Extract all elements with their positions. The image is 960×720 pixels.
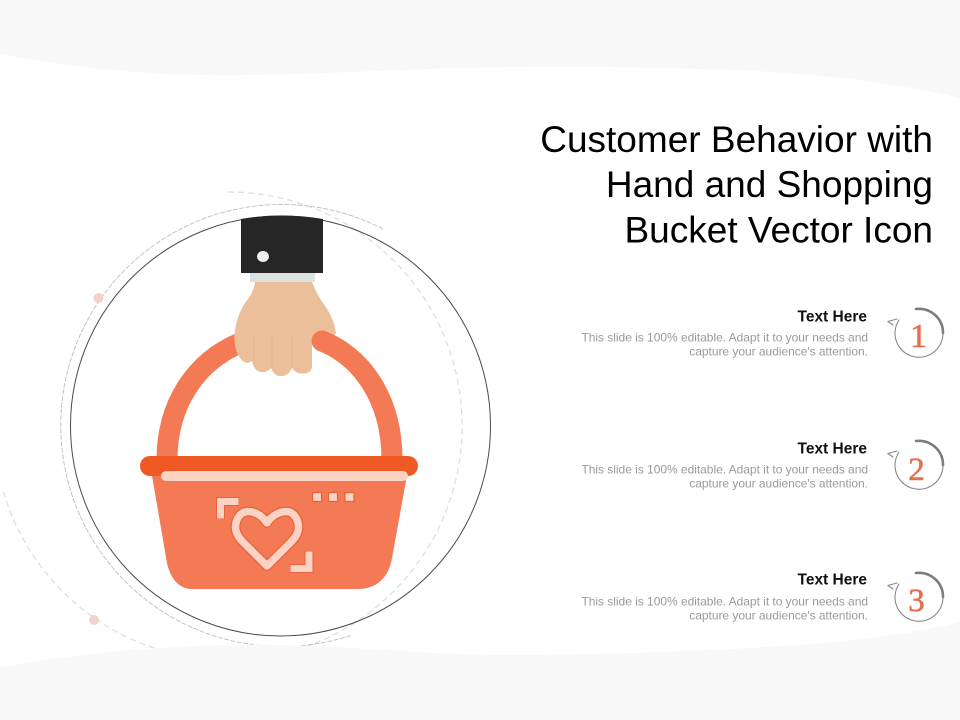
finger creases <box>254 335 292 368</box>
orbit dot lower <box>89 615 99 625</box>
heart icon <box>236 512 298 566</box>
item 3 <box>581 572 943 622</box>
jacket sleeve <box>241 216 323 273</box>
background top wave <box>0 0 960 98</box>
item 1 description: capture your audience's attention. <box>689 344 868 358</box>
item 2 description: capture your audience's attention. <box>689 476 868 490</box>
item 2 ring arrow <box>888 441 943 489</box>
focus bracket bottom-right <box>290 551 309 568</box>
dashed orbit: grey arc <box>61 204 383 646</box>
item 3 description: capture your audience's attention. <box>689 608 868 622</box>
rim highlight <box>161 471 408 481</box>
item 2 heading: Text Here <box>798 440 867 458</box>
item 3 number: 3 <box>908 583 925 619</box>
basket body <box>151 470 408 589</box>
shirt cuff <box>250 272 315 282</box>
basket rim <box>140 456 418 476</box>
dots on basket <box>312 492 354 502</box>
title: Bucket Vector Icon <box>624 210 933 250</box>
dashed orbit: light outer arc <box>3 192 462 660</box>
title: Hand and Shopping <box>606 164 933 205</box>
orbit dot upper <box>94 293 104 303</box>
sleeve button <box>257 251 269 262</box>
item 1 <box>581 308 943 358</box>
item 1 number: 1 <box>910 318 927 355</box>
item 3 heading: Text Here <box>798 572 867 588</box>
bottom wave <box>0 622 960 720</box>
solid circle <box>70 216 490 636</box>
item 3 description: This slide is 100% editable. Adapt it to your needs and <box>581 594 868 608</box>
item 1 heading: Text Here <box>798 308 867 326</box>
item 2 number: 2 <box>908 452 925 488</box>
illustration: hand holding basket <box>140 216 418 589</box>
hand <box>234 282 336 376</box>
title: Customer Behavior with <box>540 119 933 160</box>
item 2 <box>581 440 943 490</box>
item 2 description: This slide is 100% editable. Adapt it to your needs and <box>581 462 868 476</box>
basket handle left <box>167 343 240 460</box>
item 1 ring arrow <box>888 309 943 357</box>
focus bracket top-left <box>220 502 239 519</box>
item 3 ring arrow <box>888 573 943 621</box>
basket handle right <box>322 341 392 460</box>
item 1 description: This slide is 100% editable. Adapt it to your needs and <box>581 330 868 344</box>
